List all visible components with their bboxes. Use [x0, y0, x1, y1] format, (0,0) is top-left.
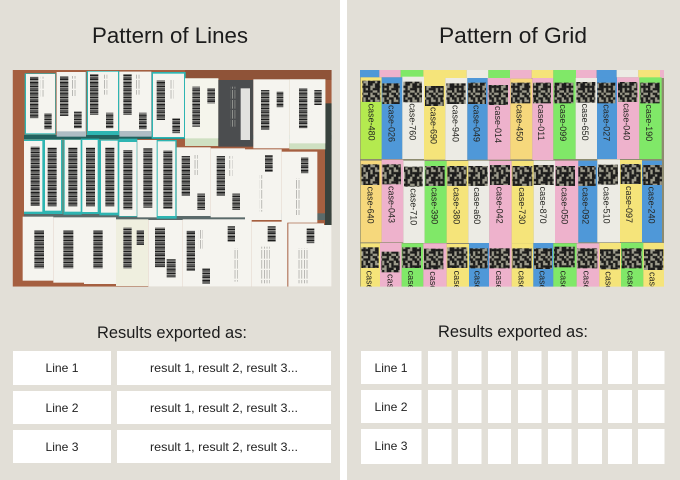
tube row 2: case-092	[580, 187, 590, 224]
tube row 2: case-380	[451, 187, 461, 224]
heading: results exported: Results exported as:	[438, 323, 588, 341]
tube row 2: case-870	[538, 187, 548, 224]
tube row 3: case-	[581, 271, 591, 293]
line 2 row	[361, 390, 664, 423]
tube row 1: case-650	[580, 104, 590, 141]
tube row 1: case-690	[429, 107, 439, 144]
line 1 row: result 1, result 2, result 3...	[150, 361, 298, 375]
tube row 1: case-014	[493, 106, 503, 143]
row 3 of boxes	[23, 217, 332, 287]
line 2 row: result 1, result 2, result 3...	[150, 401, 298, 415]
tube row 3: case-	[428, 271, 438, 293]
results table: grid	[361, 351, 664, 464]
tube row 3: case-	[494, 271, 504, 293]
line 1 row	[361, 351, 664, 384]
tube row 1	[361, 77, 662, 160]
tube row 2: case-a60	[472, 187, 482, 224]
panel: pattern of grid	[347, 0, 680, 480]
tube row 2: case-043	[387, 186, 397, 223]
tube row 2: case-730	[517, 187, 527, 224]
tube row 1: case-940	[451, 105, 461, 142]
line 3 row	[361, 429, 664, 464]
heading: pattern of lines: Pattern of Lines	[92, 23, 248, 48]
line 2 row: Line 2	[374, 400, 408, 414]
tube row 2: case-042	[495, 187, 505, 224]
tube row 1: case-026	[386, 105, 396, 142]
tube row 2	[361, 159, 662, 243]
photo: colored tubes with data matrix codes	[360, 70, 664, 296]
tube row 1: case-190	[644, 104, 654, 141]
tube row 1: case-480	[366, 104, 376, 141]
line 3 row: result 1, result 2, result 3...	[150, 440, 298, 454]
line 2 row	[13, 391, 331, 424]
line 1 row: Line 1	[374, 361, 408, 375]
tube row 2: case-710	[409, 188, 419, 225]
tube row 2: case-390	[429, 187, 439, 224]
line 1 row: Line 1	[46, 361, 79, 375]
panel: pattern of lines	[0, 0, 340, 480]
tube row 1: case-760	[407, 103, 417, 140]
line 3 row: Line 3	[374, 439, 408, 453]
row 1 of boxes	[25, 71, 325, 149]
tube row 3: case-	[604, 271, 614, 293]
tube row 3: case-	[452, 271, 462, 293]
tube row 1: case-011	[536, 104, 546, 141]
tube row 3: case-	[625, 271, 635, 293]
line 3 row: Line 3	[46, 440, 79, 454]
tube row 3	[360, 242, 664, 287]
tube row 1: case-099	[558, 104, 568, 141]
photo: barcoded boxes in lines	[13, 70, 332, 287]
tube row 3: case-	[559, 271, 569, 293]
heading: pattern of grid: Pattern of Grid	[439, 23, 587, 48]
tube row 3: case-	[647, 272, 657, 294]
tube row 3: case-	[385, 274, 395, 296]
tube row 3: case-	[537, 271, 547, 293]
tube row 1: case-450	[515, 104, 525, 141]
tube row 3: case-	[473, 271, 483, 293]
tube row 2: case-240	[646, 187, 656, 224]
tube row 3: case-	[516, 271, 526, 293]
tube row 2: case-640	[365, 187, 375, 224]
line 1 row	[13, 351, 331, 385]
tube row 2: case-510	[601, 187, 611, 224]
line 2 row: Line 2	[46, 401, 79, 415]
top partial row of tubes	[360, 70, 664, 79]
tube row 1: case-049	[472, 105, 482, 142]
tube row 3: case-	[365, 271, 375, 293]
tube row 2: case-097	[624, 186, 634, 223]
tube row 3: case-	[406, 271, 416, 293]
tube row 1: case-040	[622, 103, 632, 140]
line 3 row	[13, 430, 331, 463]
results table: lines	[13, 351, 331, 463]
tube row 1: case-027	[601, 104, 611, 141]
heading: results exported: Results exported as:	[97, 324, 247, 342]
row 2 of boxes	[24, 139, 317, 223]
tube row 2: case-050	[560, 187, 570, 224]
